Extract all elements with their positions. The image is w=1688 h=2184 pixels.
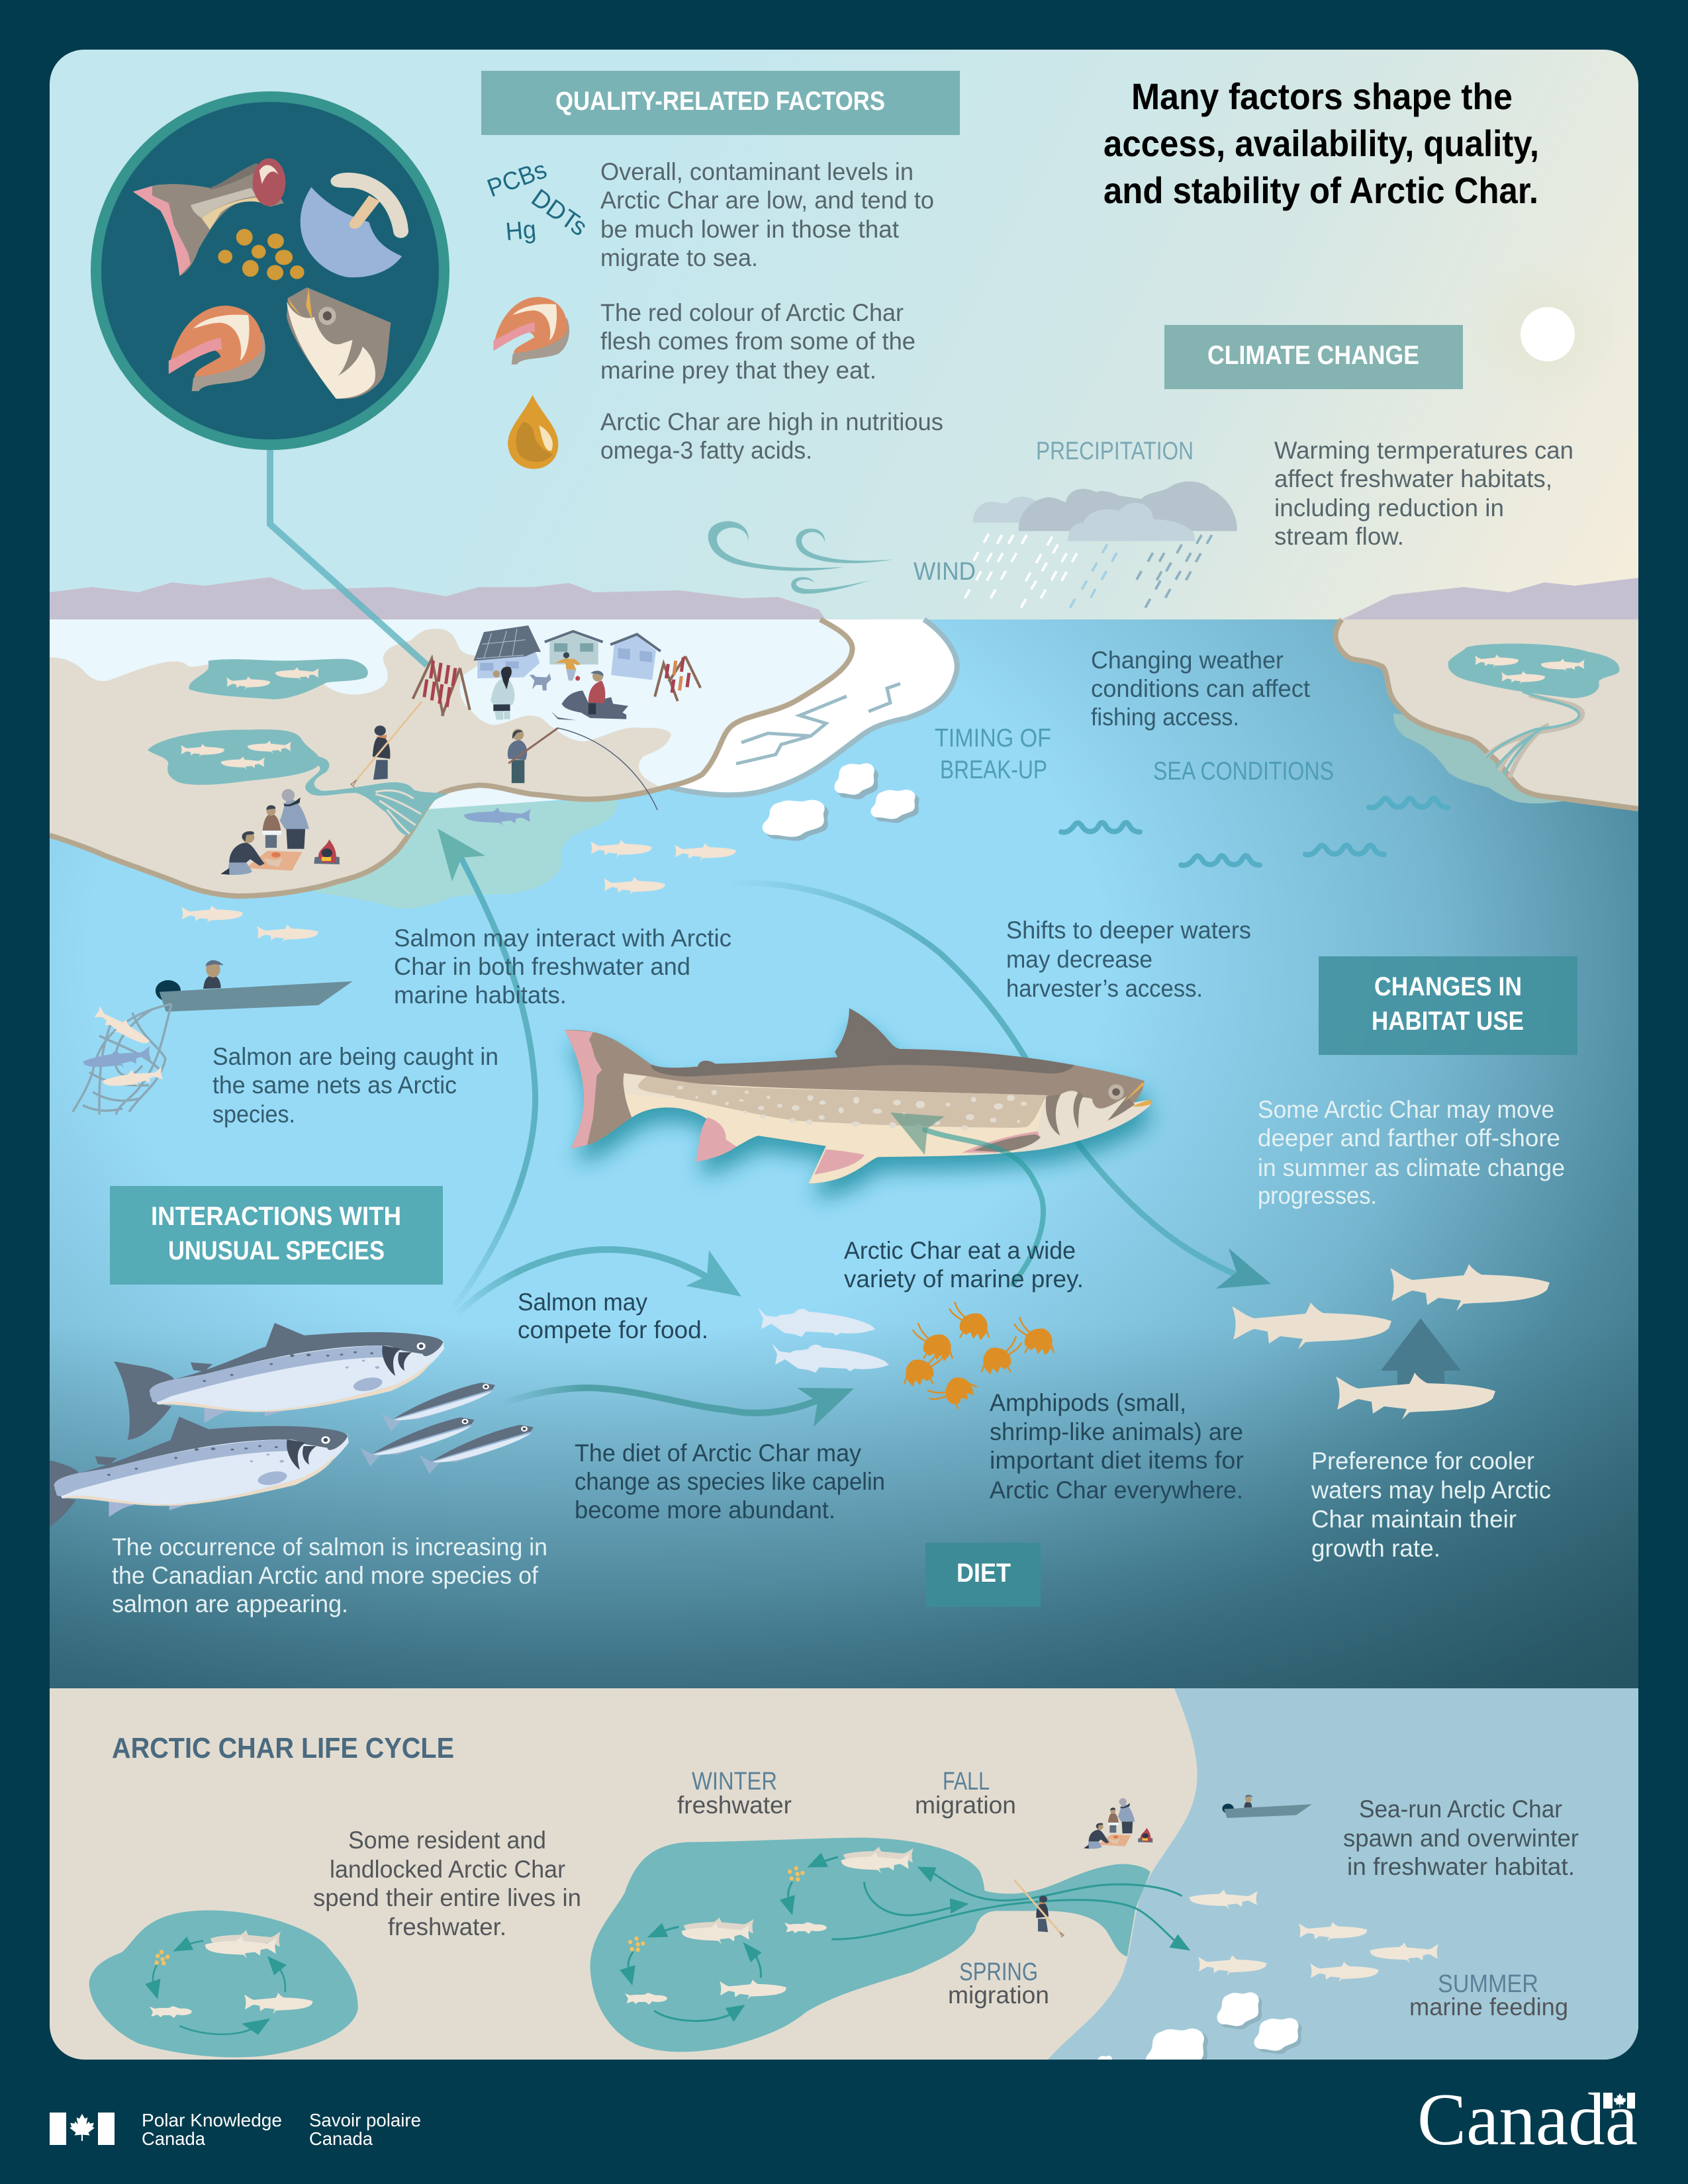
text: shifts to deeper waters: Shifts to deeper waters <box>1006 917 1251 944</box>
small boat <box>1222 1795 1312 1818</box>
resident lake <box>89 1911 358 2058</box>
life cycle land <box>50 1688 1638 2060</box>
heading: diet <box>925 1543 1041 1607</box>
text: changing weather: conditions can affect <box>1091 675 1311 702</box>
text: salmon in nets <box>212 1043 498 1128</box>
amphipods <box>904 1302 1054 1419</box>
text: salmon interact: marine habitats. <box>394 981 567 1009</box>
text: contaminants <box>600 158 934 271</box>
text: warming <box>1274 437 1573 550</box>
text: salmon in nets: the same nets as Arctic <box>212 1071 457 1099</box>
heading: diet: DIET <box>957 1559 1011 1588</box>
text: moving deeper: Some Arctic Char may move <box>1258 1096 1554 1123</box>
sea ice sheet <box>671 619 957 795</box>
icon: jaw and bone <box>301 173 408 277</box>
text: capelin diet: The diet of Arctic Char may <box>575 1439 861 1467</box>
ice floes <box>1096 1992 1302 2075</box>
label: spring: migration <box>948 1981 1049 2009</box>
icon: contaminants: PCBs <box>484 156 551 203</box>
logo: polar knowledge canada <box>50 2110 421 2149</box>
text: capelin diet: change as species like capelin <box>575 1468 885 1495</box>
text: changing weather: fishing access. <box>1091 704 1239 731</box>
label: precipitation: PRECIPITATION <box>1036 437 1194 465</box>
right land <box>1336 619 1638 809</box>
estuary plume <box>314 799 617 909</box>
green house <box>545 631 603 664</box>
icon: fish head <box>287 287 391 398</box>
text: char eat marine prey: Arctic Char eat a wide <box>844 1237 1076 1264</box>
woman with child <box>491 666 514 719</box>
blue house <box>610 634 661 680</box>
ice floes <box>763 763 919 841</box>
capelin <box>360 1383 534 1474</box>
text: amphipods: Amphipods (small, <box>990 1389 1186 1416</box>
icon: roe eggs <box>218 229 305 280</box>
text: resident char: freshwater. <box>388 1913 506 1940</box>
icon: contaminants: DDTs <box>526 184 592 242</box>
text: cooler waters <box>1311 1447 1551 1562</box>
icon: wind swirls <box>708 521 893 594</box>
label: winter: freshwater <box>677 1792 792 1819</box>
prey fish <box>758 1308 889 1373</box>
text: contaminants: Overall, contaminant levels in <box>600 158 914 185</box>
logo: polar knowledge canada: Polar Knowledge <box>142 2110 282 2130</box>
text: resident char <box>313 1827 581 1940</box>
fisher with rod <box>508 728 657 810</box>
heading: interactions with unusual species: UNUSUAL SPECIES <box>168 1236 385 1265</box>
text: cooler waters: Preference for cooler <box>1311 1447 1534 1475</box>
coastline <box>50 619 853 896</box>
boat with fisher <box>156 960 353 1012</box>
title: access, availability, quality, <box>1103 122 1539 164</box>
text: moving deeper: progresses. <box>1258 1182 1377 1209</box>
title <box>1103 75 1539 211</box>
text: changing weather <box>1091 647 1311 731</box>
drying rack left <box>413 659 470 716</box>
text: red flesh: flesh comes from some of the <box>600 328 915 355</box>
sun <box>1519 306 1575 363</box>
text: salmon interact: Char in both freshwater and <box>394 953 690 980</box>
text: moving deeper <box>1258 1096 1565 1209</box>
arrow: compete for food <box>454 1250 741 1317</box>
heading: quality-related factors <box>481 71 960 135</box>
snowmobile with rider <box>551 671 628 720</box>
icon: contaminants <box>484 156 592 246</box>
logo: canada wordmark: Canada <box>1417 2079 1638 2161</box>
logo: polar knowledge canada: Canada <box>309 2128 373 2149</box>
label: timing of break-up <box>935 724 1051 784</box>
text: contaminants: be much lower in those that <box>600 216 900 243</box>
text: compete for food: Salmon may <box>518 1289 647 1316</box>
blue salmon in estuary <box>464 807 531 826</box>
heading: changes in habitat use: CHANGES IN <box>1374 972 1522 1001</box>
label: fall: FALL <box>943 1768 990 1796</box>
text: contaminants: migrate to sea. <box>600 244 758 271</box>
text: salmon interact: Salmon may interact with Arctic <box>394 925 731 952</box>
arrow: diet over char <box>890 1113 1043 1284</box>
village: houses and people <box>220 625 700 875</box>
main arctic char <box>565 1008 1154 1198</box>
label: sea conditions: SEA CONDITIONS <box>1153 757 1334 786</box>
lake fish <box>181 667 319 770</box>
text: shifts to deeper waters: may decrease <box>1006 946 1152 973</box>
icon: oil drop <box>508 395 558 469</box>
title: and stability of Arctic Char. <box>1103 169 1538 211</box>
land <box>50 629 671 896</box>
icon: contaminants: Hg <box>504 216 538 246</box>
heading: quality-related factors: QUALITY-RELATED FACTORS <box>555 87 885 116</box>
water <box>50 619 1638 1689</box>
drying rack right <box>655 657 700 701</box>
text: sea-run char <box>1343 1796 1579 1880</box>
label: fall <box>915 1768 1016 1819</box>
text: warming: including reduction in <box>1274 494 1504 522</box>
text: char eat marine prey: variety of marine prey. <box>844 1265 1084 1293</box>
text: capelin diet: become more abundant. <box>575 1496 835 1524</box>
detail circle <box>96 97 444 445</box>
text: salmon in nets: species. <box>212 1101 295 1128</box>
text: warming: stream flow. <box>1274 523 1404 550</box>
text: shifts to deeper waters: harvester’s access. <box>1006 975 1203 1002</box>
text: sea-run char: in freshwater habitat. <box>1347 1853 1575 1880</box>
text: sea-run char: spawn and overwinter <box>1343 1825 1579 1852</box>
pole to detail circle <box>270 450 427 665</box>
heading: climate change <box>1164 325 1463 389</box>
heading: interactions with unusual species <box>110 1186 443 1285</box>
text: omega-3 <box>600 408 943 464</box>
label: summer: SUMMER <box>1438 1970 1538 1998</box>
child with ball <box>555 652 581 681</box>
text: salmon in nets: Salmon are being caught in <box>212 1043 498 1070</box>
clouds <box>973 481 1237 541</box>
label: winter: WINTER <box>692 1768 777 1796</box>
text: warming: affect freshwater habitats, <box>1274 465 1552 492</box>
icon: fish steak <box>169 306 265 391</box>
person with harpoon <box>351 702 422 788</box>
atlantic salmon <box>19 1323 534 1534</box>
life cycle sea <box>1048 1688 1638 2060</box>
solar house <box>473 625 541 678</box>
left mountains <box>50 577 825 619</box>
right mountains <box>1342 578 1638 619</box>
icon: small steak <box>493 297 569 365</box>
label: winter <box>677 1768 792 1819</box>
text: amphipods: shrimp-like animals) are <box>990 1418 1243 1445</box>
text: red flesh: The red colour of Arctic Char <box>600 299 904 326</box>
heading: climate change: CLIMATE CHANGE <box>1207 341 1419 370</box>
arrow: salmon interact <box>438 829 536 1314</box>
text: char eat marine prey <box>844 1237 1084 1293</box>
text: cooler waters: Char maintain their <box>1311 1506 1517 1533</box>
label: summer <box>1409 1970 1568 2021</box>
arrow: deeper waters <box>726 883 1271 1289</box>
migratory lake and river <box>590 1838 1190 2052</box>
text: omega-3: Arctic Char are high in nutritious <box>600 408 943 435</box>
dog <box>530 673 551 690</box>
text: red flesh <box>600 299 915 384</box>
panel: life cycle <box>50 1688 1638 2075</box>
label: timing of break-up: BREAK-UP <box>940 756 1047 784</box>
rain <box>964 534 1212 608</box>
icon: fish tail piece <box>133 158 285 276</box>
heading: life cycle: ARCTIC CHAR LIFE CYCLE <box>112 1732 454 1764</box>
text: moving deeper: in summer as climate change <box>1258 1154 1565 1181</box>
label: spring <box>948 1958 1049 2009</box>
small family <box>1084 1798 1152 1848</box>
habitat use: rising fish <box>1232 1264 1550 1420</box>
snow field <box>50 619 850 809</box>
open water fish <box>181 840 736 942</box>
text: amphipods: important diet items for <box>990 1447 1244 1474</box>
marine fish <box>1189 1889 1438 1982</box>
resident lake fish <box>150 1930 313 2018</box>
text: resident char: landlocked Arctic Char <box>330 1856 565 1883</box>
migratory lake fish <box>625 1846 914 2005</box>
text: occurrence of salmon: the Canadian Arctic and more species of <box>112 1562 539 1589</box>
text: red flesh: marine prey that they eat. <box>600 357 876 384</box>
heading: interactions with unusual species: INTERACTIONS WITH <box>151 1202 401 1231</box>
label: summer: marine feeding <box>1409 1993 1568 2021</box>
text: compete for food: compete for food. <box>518 1316 708 1343</box>
sky background <box>50 50 1638 619</box>
text: cooler waters: waters may help Arctic <box>1311 1477 1551 1504</box>
text: resident char: Some resident and <box>348 1827 546 1854</box>
text: changing weather: Changing weather <box>1091 647 1284 674</box>
text: capelin diet <box>575 1439 885 1524</box>
fishing net with fish <box>73 1004 171 1115</box>
text: shifts to deeper waters <box>1006 917 1251 1002</box>
logo: polar knowledge canada: Canada <box>142 2128 205 2149</box>
text: contaminants: Arctic Char are low, and tend to <box>600 187 934 214</box>
logo: polar knowledge canada: Savoir polaire <box>309 2110 421 2130</box>
text: amphipods: Arctic Char everywhere. <box>990 1477 1243 1504</box>
waves <box>1061 798 1448 866</box>
text: warming: Warming termperatures can <box>1274 437 1573 464</box>
title: Many factors shape the <box>1131 75 1513 117</box>
text: occurrence of salmon: salmon are appearing. <box>112 1590 348 1617</box>
text: occurrence of salmon: The occurrence of salmon is increasing in <box>112 1533 547 1561</box>
arrow: capelin diet <box>500 1388 854 1427</box>
label: timing of break-up: TIMING OF <box>935 724 1051 752</box>
label: spring: SPRING <box>959 1958 1038 1986</box>
heading: changes in habitat use: HABITAT USE <box>1372 1007 1524 1036</box>
lakes and river delta <box>148 659 447 836</box>
ice cracks <box>736 684 900 764</box>
label: fall: migration <box>915 1792 1016 1819</box>
text: sea-run char: Sea-run Arctic Char <box>1359 1796 1562 1823</box>
text: occurrence of salmon <box>112 1533 547 1617</box>
text: cooler waters: growth rate. <box>1311 1535 1440 1562</box>
text: compete for food <box>518 1289 708 1343</box>
text: resident char: spend their entire lives in <box>313 1884 581 1911</box>
text: omega-3: omega-3 fatty acids. <box>600 437 812 464</box>
heading: changes in habitat use <box>1319 956 1577 1055</box>
text: moving deeper: deeper and farther off-shore <box>1258 1124 1560 1152</box>
text: amphipods <box>990 1389 1244 1504</box>
family at camp <box>220 789 340 875</box>
text: salmon interact <box>394 925 731 1009</box>
label: wind: WIND <box>914 558 976 586</box>
